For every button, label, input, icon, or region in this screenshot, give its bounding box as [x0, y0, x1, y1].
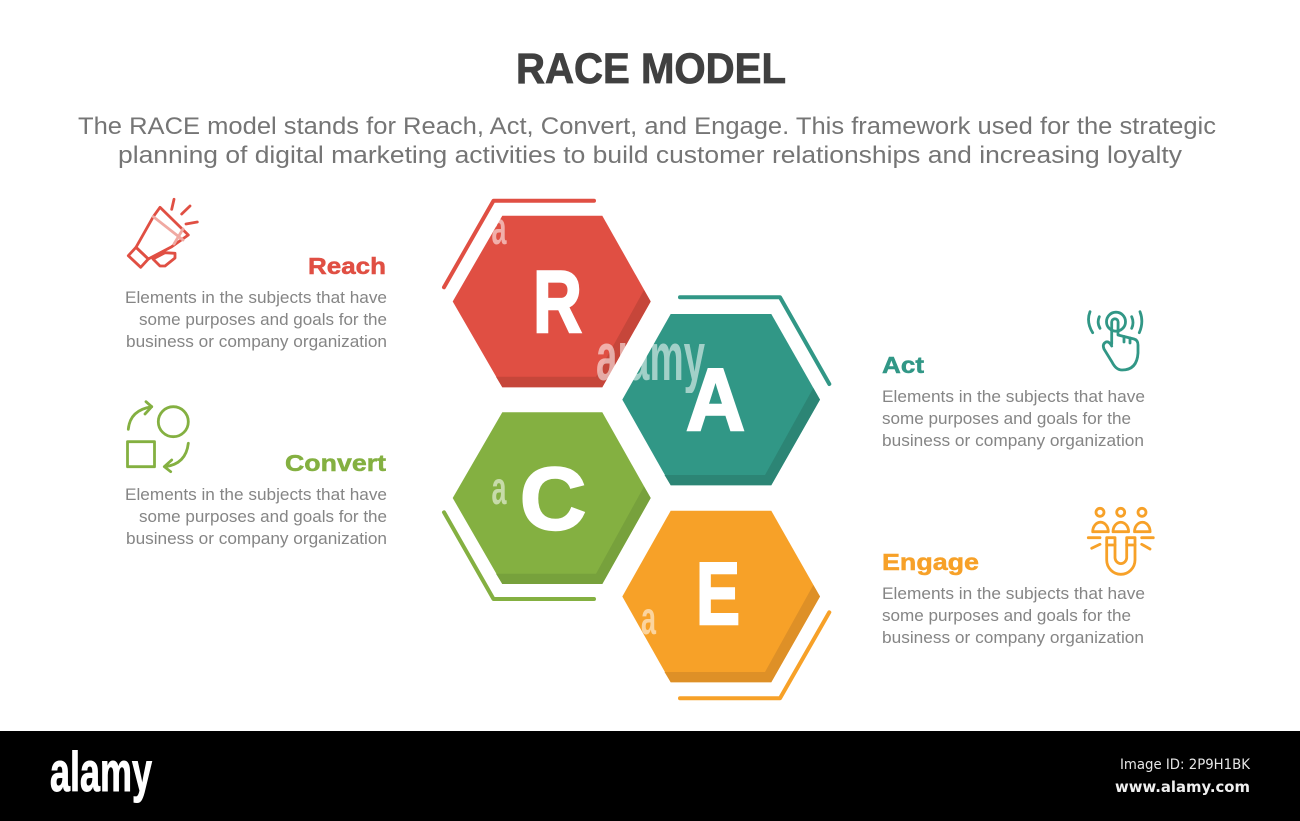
text block: Convert: business or company organization [126, 529, 387, 548]
icon: touch hand [1089, 312, 1142, 370]
text block: Engage: Engage [882, 549, 979, 575]
text block: Act: business or company organization [882, 431, 1144, 450]
hexagon R: Reach [444, 201, 651, 387]
footer url: www.alamy.com [1115, 778, 1250, 796]
text block: Reach [125, 253, 387, 351]
watermark overlay: a [641, 592, 656, 644]
subtitle text: planning of digital marketing activities to build customer relationships and increasing loyalty [118, 142, 1182, 169]
watermark overlay: alamy [596, 319, 705, 395]
watermark overlay [492, 202, 705, 644]
hexagon A: Act: A [686, 350, 745, 449]
watermark overlay: a [492, 462, 507, 514]
text block: Act: Elements in the subjects that have [882, 387, 1145, 406]
hexagon R: Reach: R [533, 252, 582, 351]
hexagon C: Convert [444, 412, 651, 599]
text block: Convert: some purposes and goals for the [139, 507, 387, 526]
text block: Act: some purposes and goals for the [882, 409, 1131, 428]
text block: Reach: some purposes and goals for the [139, 310, 387, 329]
text block: Reach: Elements in the subjects that have [125, 288, 387, 307]
footer logo: alamy [50, 740, 152, 803]
hexagon C: Convert: C [520, 449, 586, 548]
text block: Convert: Elements in the subjects that have [125, 485, 387, 504]
title: RACE MODEL [516, 45, 786, 93]
text block: Act: Act [882, 352, 924, 378]
text block: Engage [882, 549, 1145, 647]
hexagon E: Engage: E [696, 544, 740, 643]
footer image id: Image ID: 2P9H1BK [1120, 757, 1250, 773]
text block: Convert [125, 450, 387, 548]
icon: people and magnet [1088, 508, 1153, 574]
subtitle text: The RACE model stands for Reach, Act, Convert, and Engage. This framework used for the strategic [78, 113, 1216, 140]
icon: convert shapes and arrows [128, 402, 188, 472]
text block: Engage: business or company organization [882, 628, 1144, 647]
footer bar [0, 731, 1300, 821]
text block: Act [882, 352, 1145, 450]
icon: megaphone [128, 199, 197, 267]
watermark overlay: a [492, 202, 507, 254]
text block: Convert: Convert [285, 450, 386, 476]
hexagon E: Engage [622, 511, 829, 698]
text block: Reach: business or company organization [126, 332, 387, 351]
text block: Engage: some purposes and goals for the [882, 606, 1131, 625]
text block: Engage: Elements in the subjects that have [882, 584, 1145, 603]
hexagon A: Act [622, 297, 829, 485]
subtitle text [78, 113, 1216, 169]
text block: Reach: Reach [308, 253, 386, 279]
